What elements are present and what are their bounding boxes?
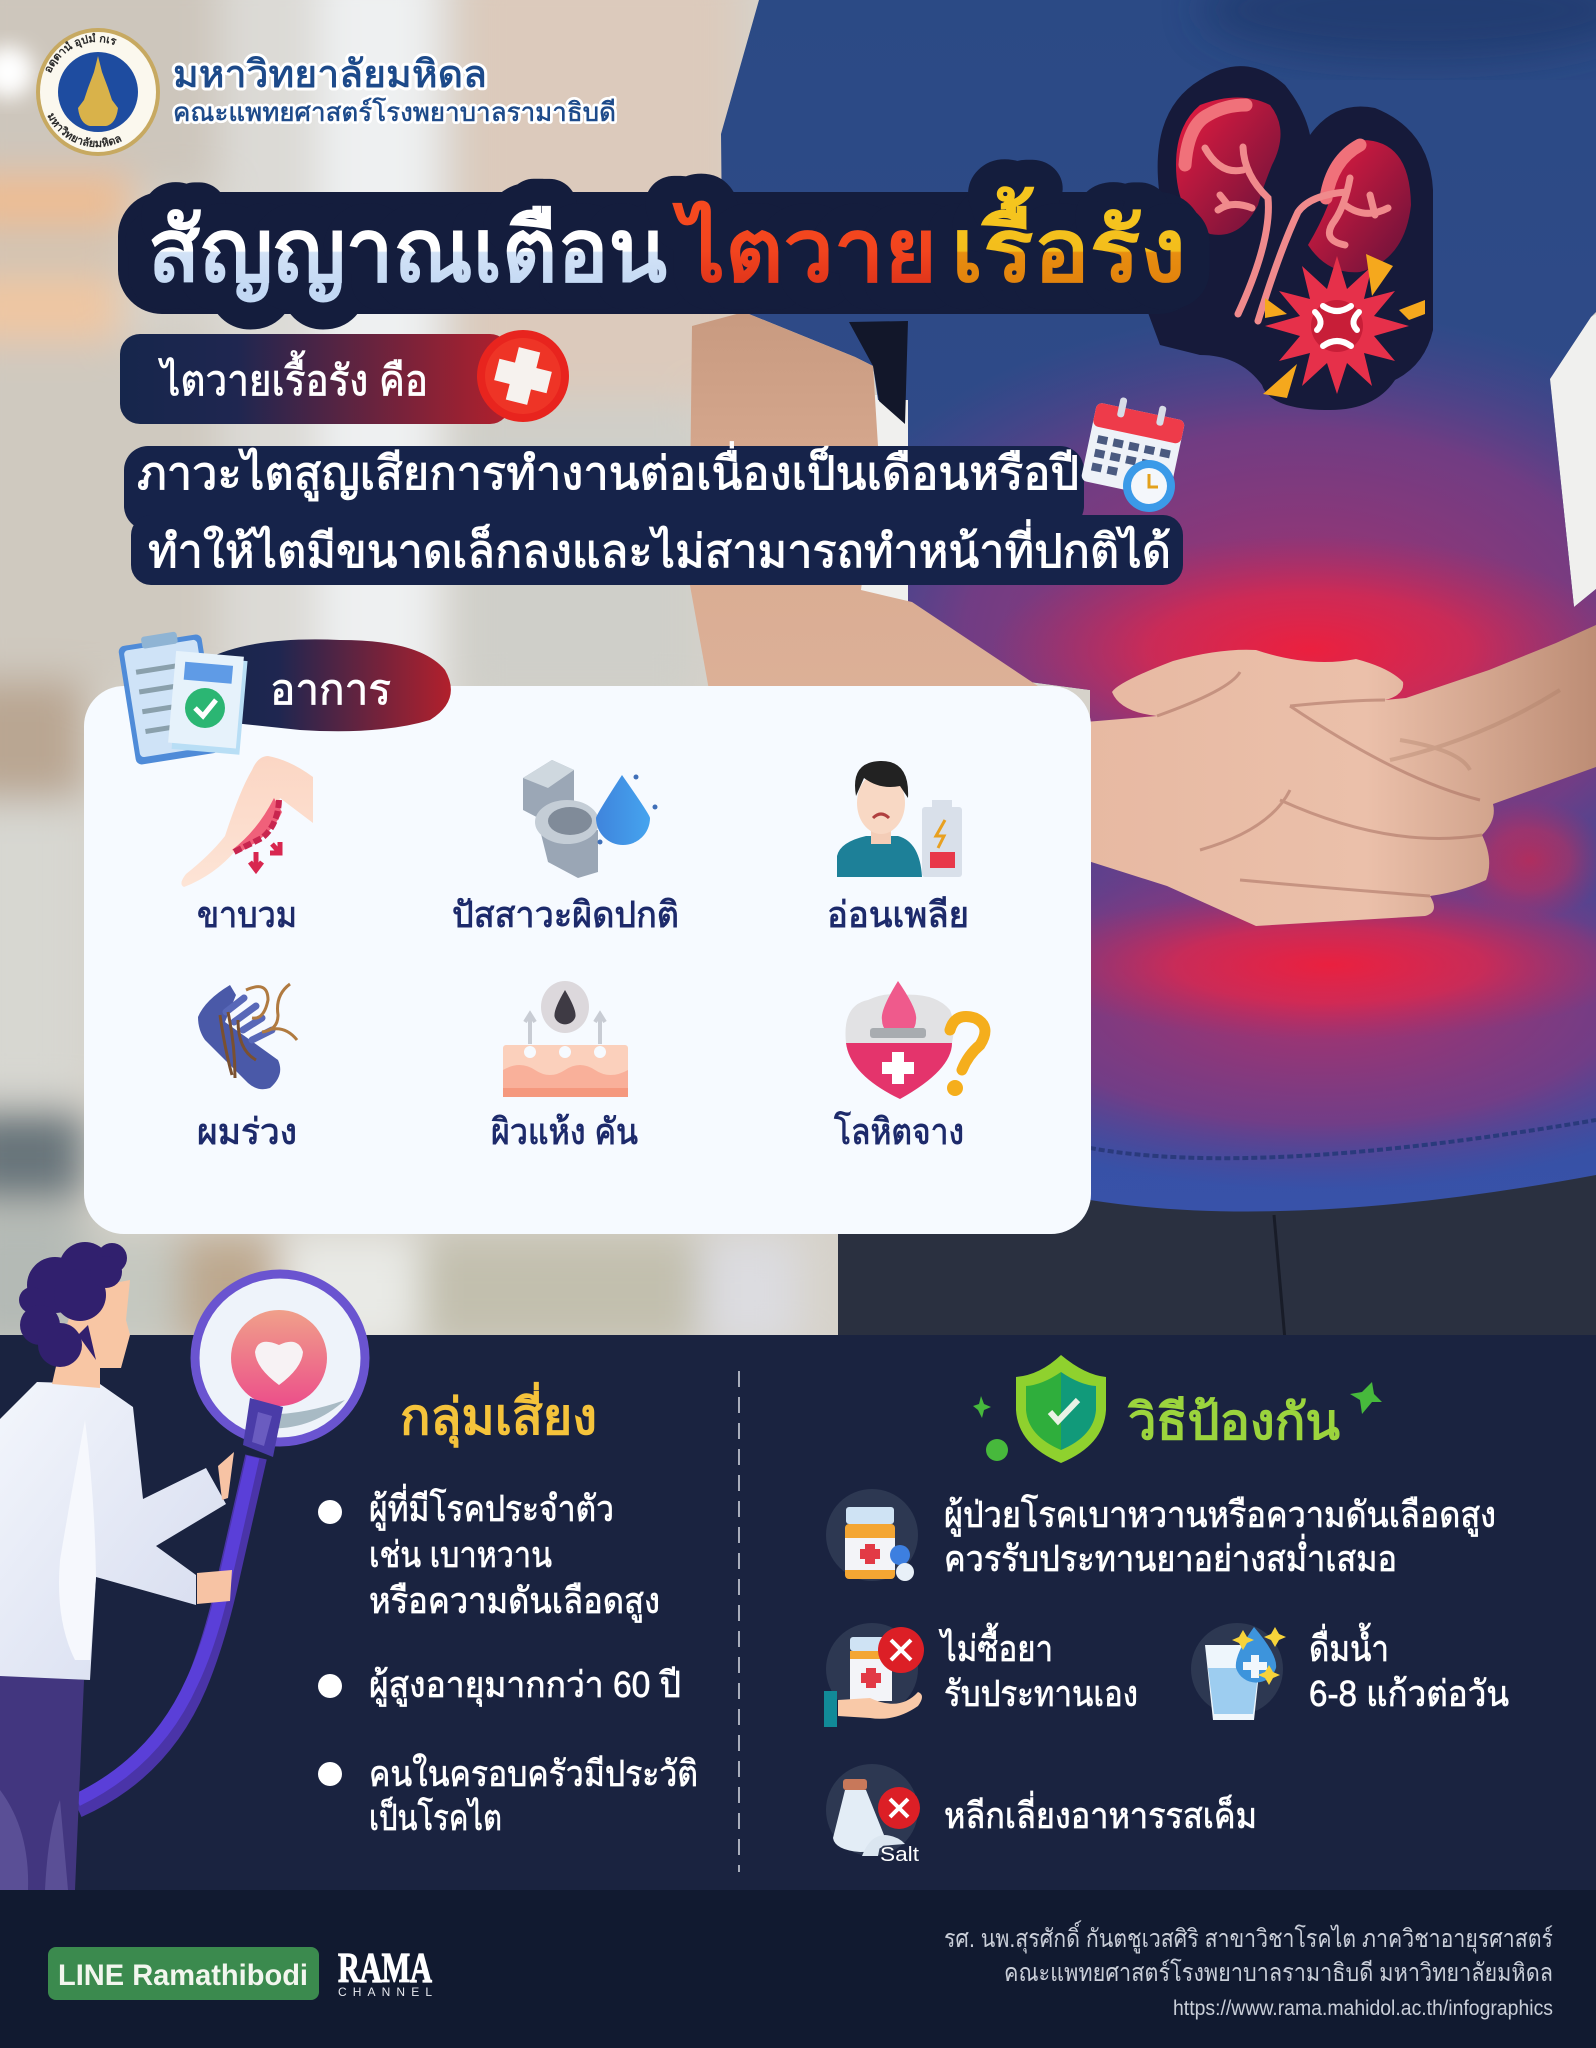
- university name: คณะแพทยศาสตร์โรงพยาบาลรามาธิบดี: [173, 97, 616, 127]
- definition text: ทำให้ไตมีขนาดเล็กลงและไม่สามารถทำหน้าที่ปกติได้: [148, 519, 1171, 577]
- prevention item: take medicine regularly: ควรรับประทานยาอย่างสม่ำเสมอ: [944, 1534, 1397, 1579]
- logo: Mahidol University seal: อตฺตานํ อุปมํ กเร: [46, 32, 117, 73]
- icon: swollen leg: [181, 756, 313, 887]
- prevention item: avoid salty food: หลีกเลี่ยงอาหารรสเค็ม: [944, 1791, 1257, 1836]
- icon: glass of water: [1191, 1623, 1286, 1720]
- pants: [0, 1672, 84, 1890]
- title: สัญญาณเตือน: [148, 201, 667, 304]
- symptom: hair loss: ผมร่วง: [197, 1111, 297, 1152]
- stethoscope tube: [77, 1457, 256, 1807]
- prevention heading: วิธีป้องกัน: [1127, 1394, 1340, 1450]
- definition text: [124, 441, 1183, 585]
- gaps of bright background beside the torso: [855, 312, 1596, 607]
- symptom: anemia: โลหิตจาง: [834, 1111, 964, 1152]
- title: เรื้อรัง: [951, 186, 1186, 300]
- symptom: dry itchy skin: [491, 981, 638, 1152]
- icon: clipboard: [117, 628, 248, 765]
- title: ไตวาย: [672, 201, 937, 300]
- prevention item: take medicine regularly: ผู้ป่วยโรคเบาหวานหรือความดันเลือดสูง: [944, 1494, 1496, 1537]
- RAMA Channel logo: CHANNEL: [338, 1985, 432, 1999]
- RAMA Channel logo: [338, 1946, 432, 1999]
- university name: [173, 54, 616, 127]
- stethoscope chest piece: [195, 1274, 365, 1457]
- icon: tired man and low battery: [837, 761, 962, 877]
- icon: blood heart and question mark: [845, 981, 985, 1099]
- left arm: [689, 312, 1044, 690]
- risk group list: ผู้สูงอายุมากกว่า 60 ปี: [369, 1664, 681, 1707]
- RAMA Channel logo: RAMA: [338, 1946, 432, 1992]
- risk group list: เช่น เบาหวาน: [369, 1534, 552, 1575]
- title: [118, 186, 1203, 314]
- hands: [1085, 625, 1596, 926]
- risk group heading: กลุ่มเสี่ยง: [400, 1382, 597, 1448]
- symptom: swollen legs: [181, 756, 313, 935]
- risk group list: ผู้ที่มีโรคประจำตัว: [369, 1484, 614, 1531]
- title: ไตวาย: [672, 201, 937, 300]
- symptom: abnormal urination: [452, 760, 679, 935]
- credit text: https://www.rama.mahidol.ac.th/infographics: [1173, 1997, 1553, 2020]
- prevention item: drink water: ดื่มน้ำ: [1309, 1622, 1389, 1669]
- icon: medical cross: [477, 330, 569, 422]
- icon: comb with fallen hair: [198, 984, 297, 1089]
- symptom: fatigue: อ่อนเพลีย: [827, 894, 969, 935]
- icon: hand with bottle and red cross: [824, 1623, 924, 1727]
- definition text: ภาวะไตสูญเสียการทำงานต่อเนื่องเป็นเดือนหรือปี: [137, 441, 1079, 501]
- head and neck: [52, 1280, 130, 1388]
- university name: มหาวิทยาลัยมหิดล: [173, 54, 487, 96]
- symptom: fatigue: [827, 761, 969, 935]
- background photo: man holding abdomen: [0, 0, 1596, 1350]
- prevention item: no self medication: [824, 1622, 1138, 1727]
- symptom: anemia: [834, 981, 985, 1152]
- panel: symptoms: [84, 628, 1091, 1234]
- icon: salt shaker: Salt: [880, 1844, 919, 1866]
- abdominal glow: [908, 344, 1596, 897]
- prevention item: no self medication: รับประทานเอง: [944, 1673, 1138, 1714]
- heading pill: chronic kidney failure is: ไตวายเรื้อรัง คือ: [158, 350, 428, 404]
- hands: [197, 1452, 234, 1604]
- title: เรื้อรัง: [951, 186, 1186, 300]
- risk group list: เป็นโรคไต: [369, 1795, 502, 1838]
- credit text: [944, 1920, 1553, 2020]
- symptom: abnormal urination: ปัสสาวะผิดปกติ: [452, 894, 679, 935]
- shadow under sleeve: [849, 321, 908, 424]
- logo: Mahidol University seal: มหาวิทยาลัยมหิดล: [48, 113, 122, 148]
- shirt: [700, 0, 1596, 1240]
- risk group list: คนในครอบครัวมีประวัติ: [369, 1753, 698, 1794]
- pants: [838, 1170, 1596, 1340]
- symptoms heading pill: อาการ: [270, 666, 391, 713]
- symptom: hair loss: [197, 984, 297, 1152]
- prevention item: drink water: 6-8 แก้วต่อวัน: [1309, 1673, 1509, 1714]
- icon: kidneys in pain: [1147, 66, 1433, 410]
- LINE Ramathibodi badge: [48, 1947, 319, 2000]
- prevention item: drink water: [1191, 1622, 1509, 1720]
- risk group list: หรือความดันเลือดสูง: [369, 1580, 660, 1623]
- doctor with stethoscope illustration: [0, 1242, 365, 1890]
- logo: Mahidol University seal: [36, 28, 160, 156]
- icon: green shield: [973, 1355, 1382, 1463]
- university name: มหาวิทยาลัยมหิดล: [173, 54, 487, 96]
- panel: lower navy band: [0, 1335, 1596, 1890]
- heading pill: chronic kidney failure is: [120, 330, 569, 424]
- icon: toilet and water drop: [523, 760, 658, 878]
- university name: คณะแพทยศาสตร์โรงพยาบาลรามาธิบดี: [173, 97, 616, 127]
- footer band: [0, 1890, 1596, 2048]
- prevention item: take medicine regularly: [826, 1489, 1496, 1581]
- symptoms heading pill: [205, 639, 451, 731]
- icon: dry skin layers: [503, 981, 628, 1097]
- icon: calendar and clock: [1081, 392, 1187, 512]
- icon: medicine bottle: [826, 1489, 918, 1581]
- prevention item: no self medication: ไม่ซื้อยา: [938, 1622, 1053, 1669]
- risk group list: [318, 1484, 698, 1838]
- symptom: dry itchy skin: ผิวแห้ง คัน: [491, 1111, 638, 1152]
- icon: salt shaker: [826, 1764, 920, 1866]
- coat: [0, 1382, 226, 1680]
- prevention item: avoid salty food: [826, 1764, 1257, 1866]
- LINE Ramathibodi badge: LINE Ramathibodi: [58, 1959, 308, 1992]
- title: สัญญาณเตือน: [148, 201, 667, 304]
- hair: [19, 1242, 127, 1367]
- symptom: swollen legs: ขาบวม: [197, 894, 297, 935]
- pain burst: [1263, 254, 1425, 398]
